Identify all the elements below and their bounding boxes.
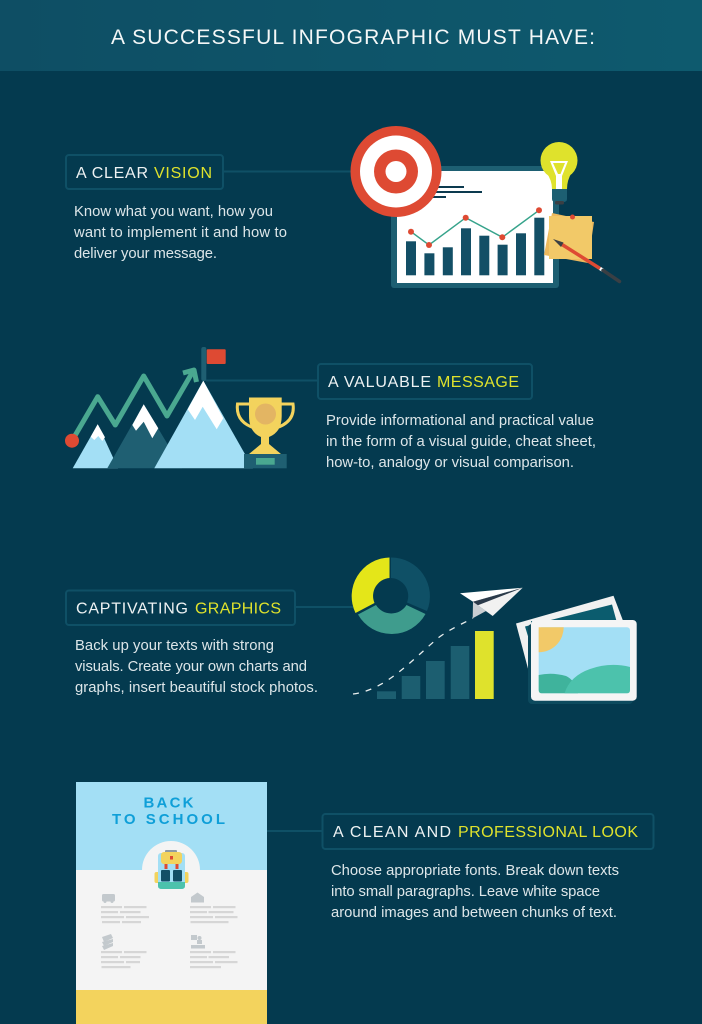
placeholder text lines — [101, 906, 238, 968]
icon: flag — [201, 347, 226, 381]
text: a clear vision: deliver your message. — [74, 246, 217, 262]
icon: trophy — [237, 398, 293, 468]
text: captivating graphics — [75, 638, 318, 696]
icon: bus — [102, 894, 115, 903]
icon: photos — [516, 596, 637, 704]
illustration: chart board — [391, 166, 559, 288]
title: A SUCCESSFUL INFOGRAPHIC MUST HAVE: — [111, 26, 595, 49]
text: a valuable message: how-to, analogy or visual comparison. — [326, 455, 574, 471]
poster title — [112, 794, 225, 828]
icon: sticky notes and pencil — [544, 213, 620, 282]
heading: a clean and professional look: A CLEAN AND — [333, 824, 451, 841]
header banner — [0, 0, 702, 71]
text: a clean and professional look — [331, 863, 619, 921]
panel: a clean and professional look — [76, 782, 654, 1024]
heading: a clean and professional look: PROFESSIONAL LOOK — [458, 824, 638, 841]
dashed flight path — [353, 618, 473, 694]
text: a clear vision: Know what you want, how you — [74, 204, 273, 220]
text: a valuable message — [326, 413, 596, 471]
text: a valuable message: Provide informational and practical value — [326, 413, 594, 429]
heading: a clear vision: A CLEAR — [76, 165, 148, 182]
icon: classroom — [191, 935, 205, 948]
heading: captivating graphics — [66, 590, 295, 625]
panel: a clear vision — [66, 126, 620, 288]
text: a clean and professional look: around images and between chunks of text. — [331, 905, 617, 921]
heading: a clean and professional look — [322, 814, 654, 849]
heading: a valuable message: A VALUABLE — [328, 374, 431, 391]
chart: rising bars — [377, 631, 494, 699]
text: captivating graphics: graphs, insert beautiful stock photos. — [75, 680, 318, 696]
heading: a clear vision — [66, 155, 223, 189]
icon: paper airplane — [460, 588, 523, 618]
text: a clean and professional look: into small paragraphs. Leave white space — [331, 884, 600, 900]
heading: a clear vision: VISION — [154, 165, 212, 182]
heading: captivating graphics: CAPTIVATING — [76, 600, 188, 618]
icon: rising arrow — [65, 370, 196, 448]
text: captivating graphics: visuals. Create your own charts and — [75, 659, 307, 675]
icon: books — [102, 934, 113, 950]
illustration: mountains — [73, 381, 253, 468]
heading: a valuable message: MESSAGE — [437, 374, 519, 391]
chart: donut — [352, 557, 430, 634]
poster title: BACK — [144, 794, 194, 811]
panel: captivating graphics — [66, 557, 637, 704]
text: a clean and professional look: Choose appropriate fonts. Break down texts — [331, 863, 619, 879]
poster title: TO SCHOOL — [112, 811, 225, 828]
illustration: poster — [76, 782, 267, 1024]
icon: school building — [191, 892, 204, 902]
text: a clear vision — [73, 204, 287, 262]
icon: target — [350, 126, 442, 217]
heading: a valuable message — [318, 364, 532, 399]
text: a valuable message: in the form of a visual guide, cheat sheet, — [326, 434, 596, 450]
icon: light bulb — [540, 142, 578, 204]
text: a clear vision: want to implement it and how to — [73, 225, 287, 241]
icon: backpack — [154, 850, 188, 889]
text: captivating graphics: Back up your texts with strong — [75, 638, 274, 654]
panel: a valuable message — [65, 347, 596, 471]
heading: captivating graphics: GRAPHICS — [195, 600, 281, 618]
